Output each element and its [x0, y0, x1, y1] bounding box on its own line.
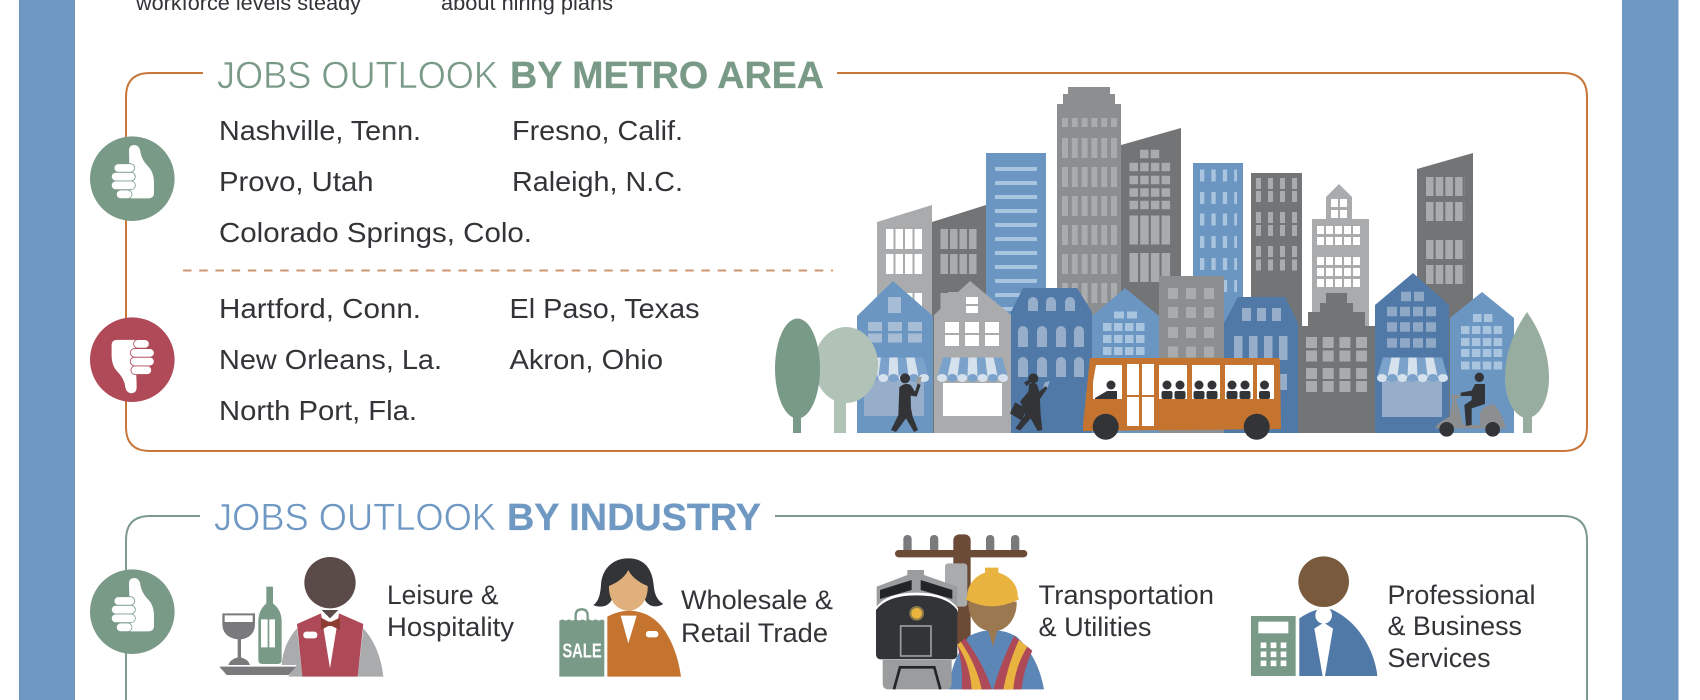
list: metros with worst outlook: North Port, Fla.: [219, 395, 417, 426]
label: transportation and utilities: & Utilities: [1038, 612, 1152, 642]
text: cropped survey captions at top: [135, 0, 613, 15]
awnings: [858, 358, 1448, 382]
list: metros with best outlook: Colorado Springs, Colo.: [219, 217, 532, 248]
heading: jobs outlook by metro area: BY METRO AREA: [510, 55, 824, 97]
list: metros with best outlook: Raleigh, N.C.: [512, 166, 683, 197]
label: leisure and hospitality: Hospitality: [387, 612, 515, 642]
scooter rider: [1435, 373, 1506, 437]
list: metros with best outlook: Fresno, Calif.: [512, 115, 683, 146]
panel: jobs outlook by metro area: [90, 55, 1587, 451]
heading: jobs outlook by metro area: JOBS OUTLOOK: [217, 55, 498, 97]
panel border: industry: [126, 516, 1587, 700]
list: metros with best outlook: [219, 115, 683, 248]
icon: waiter with wine: [219, 557, 383, 677]
panel: jobs outlook by industry: [90, 497, 1587, 700]
right blue side band: [1622, 0, 1678, 700]
left blue side band: [19, 0, 75, 700]
icon: thumbs down, metro: [90, 317, 175, 402]
heading: jobs outlook by industry: [214, 497, 761, 539]
label: wholesale and retail trade: [681, 585, 833, 648]
list: metros with worst outlook: New Orleans, La.: [219, 344, 442, 375]
label: professional and business services: [1388, 580, 1536, 673]
icon: business person with calculator: [1251, 556, 1377, 676]
icon: thumbs up, metro: [90, 136, 175, 221]
list: metros with worst outlook: Akron, Ohio: [510, 344, 663, 375]
label: wholesale and retail trade: Retail Trade: [681, 618, 828, 648]
illustration: city skyline: [775, 87, 1549, 440]
panel border: metro area: [126, 73, 1587, 451]
label: transportation and utilities: [1038, 580, 1214, 642]
icon: retail worker with sale bag: SALE: [562, 640, 602, 662]
heading: jobs outlook by industry: JOBS OUTLOOK: [214, 497, 496, 539]
label: professional and business services: Professional: [1388, 580, 1536, 610]
label: transportation and utilities: Transportation: [1038, 580, 1214, 610]
trees: [775, 312, 1549, 433]
label: leisure and hospitality: Leisure &: [387, 580, 498, 610]
list: metros with worst outlook: [219, 293, 700, 426]
list: metros with best outlook: Provo, Utah: [219, 166, 374, 197]
heading: jobs outlook by metro area: [217, 55, 824, 97]
heading: jobs outlook by industry: BY INDUSTRY: [507, 497, 761, 539]
label: professional and business services: & Business: [1388, 611, 1522, 641]
back buildings: [877, 87, 1473, 433]
label: professional and business services: Services: [1388, 643, 1490, 673]
icon: retail worker with sale bag: [559, 558, 681, 677]
label: leisure and hospitality: [387, 580, 515, 642]
list: metros with best outlook: Nashville, Tenn.: [219, 115, 421, 146]
front row of houses: [857, 273, 1514, 433]
bus: [1083, 358, 1281, 440]
icon: thumbs up, industry: [90, 569, 175, 654]
list: metros with worst outlook: El Paso, Texas: [510, 293, 700, 324]
pedestrian with phone: [891, 373, 922, 432]
pedestrian with briefcase: [1010, 373, 1050, 431]
label: wholesale and retail trade: Wholesale &: [681, 585, 833, 615]
list: metros with worst outlook: Hartford, Conn.: [219, 293, 421, 324]
icon: train, utility pole and worker: [876, 534, 1044, 689]
